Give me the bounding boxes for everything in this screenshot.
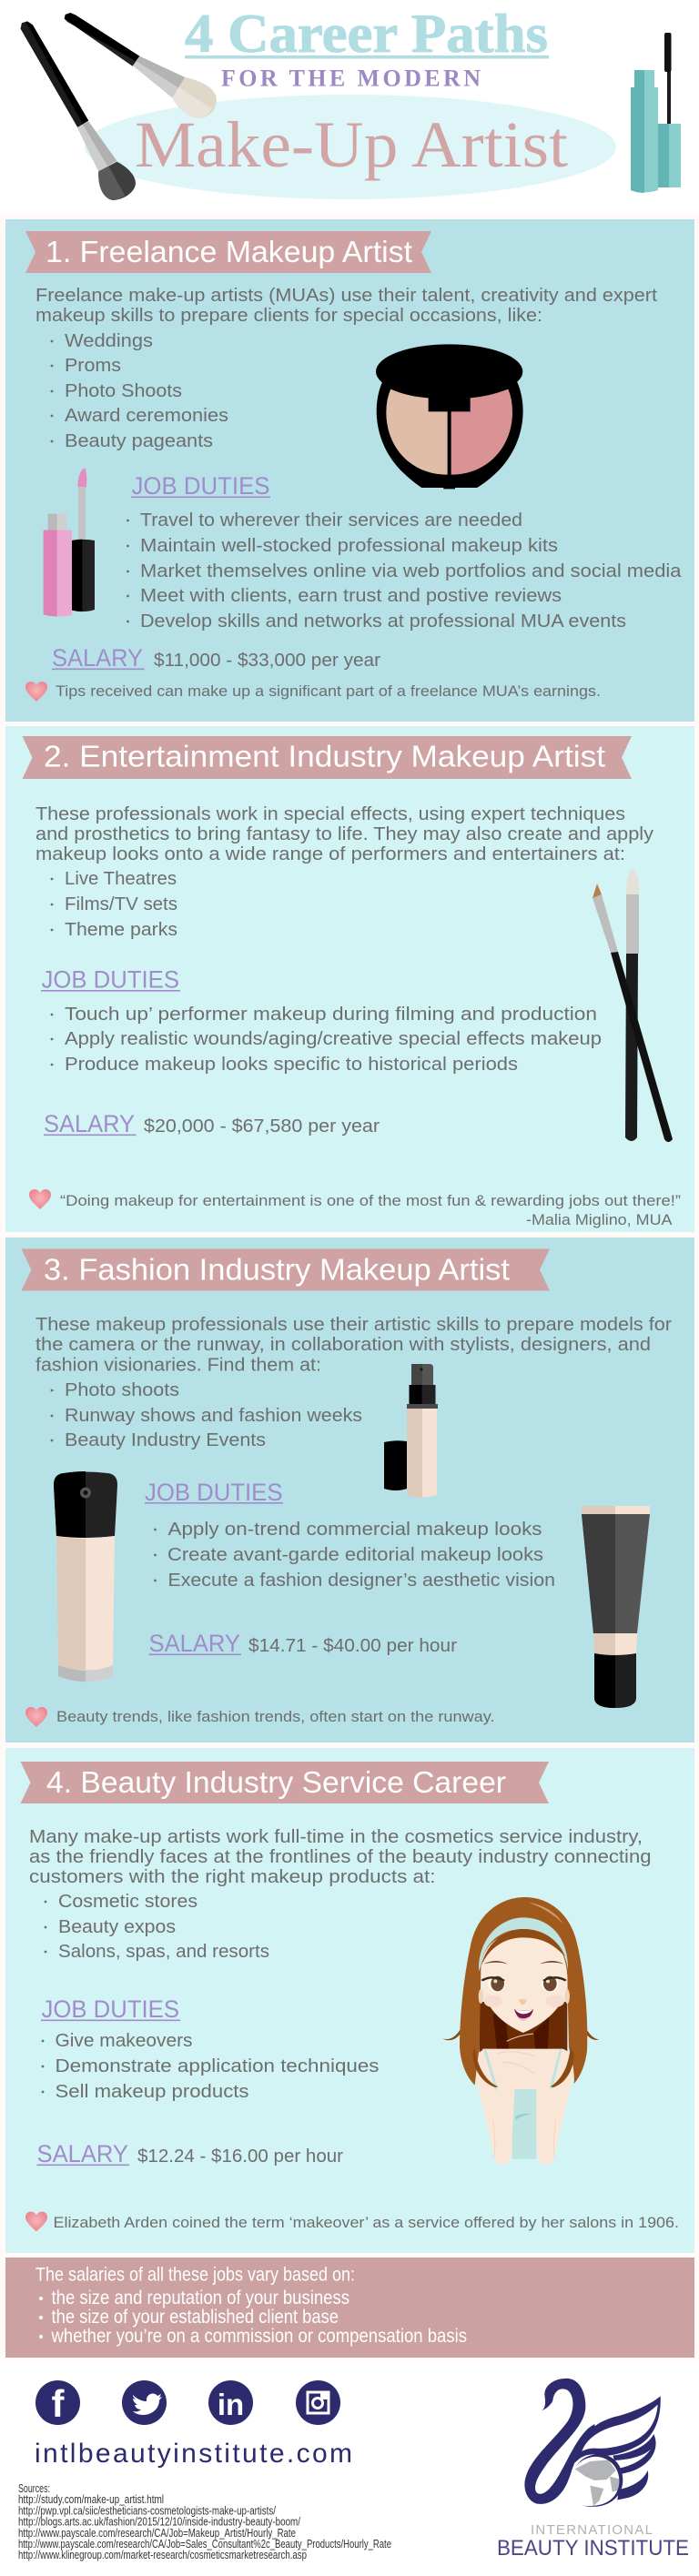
salary: SALARY bbox=[149, 1630, 240, 1657]
job duties list: Sell makeup products bbox=[55, 2082, 249, 2102]
icon: large foundation bottle bbox=[54, 1471, 117, 1682]
ribbon heading 3: 3. Fashion Industry Makeup Artist bbox=[44, 1252, 510, 1287]
intro text bbox=[35, 286, 657, 326]
salary: $20,000 - $67,580 per year bbox=[144, 1116, 380, 1136]
salary factors list: the size and reputation of your business bbox=[51, 2288, 350, 2308]
job duties list: Execute a fashion designer’s aesthetic vision bbox=[167, 1571, 555, 1591]
panel: freelance makeup artist bbox=[5, 219, 694, 722]
footer bbox=[0, 2362, 699, 2571]
intro text bbox=[35, 804, 653, 864]
quote bbox=[29, 1189, 681, 1228]
intro text: makeup skills to prepare clients for special occasions, like: bbox=[35, 306, 542, 326]
workplaces list: Cosmetic stores bbox=[58, 1892, 198, 1912]
intro text bbox=[29, 1827, 652, 1887]
icon: twitter bbox=[122, 2380, 167, 2425]
icon: compact palette bbox=[376, 344, 523, 489]
salary bbox=[44, 1110, 380, 1137]
venues list: Theme parks bbox=[65, 920, 177, 940]
icon: teal mascara bbox=[631, 33, 681, 193]
job duties list bbox=[42, 2031, 379, 2102]
icon: dark tube bbox=[582, 1506, 650, 1708]
occasions list: Weddings bbox=[65, 331, 153, 351]
ribbon heading 4 bbox=[20, 1762, 549, 1803]
intro text: customers with the right makeup products at: bbox=[29, 1867, 435, 1887]
panel: beauty industry service career bbox=[5, 1748, 694, 2253]
icon: small foundation pump bbox=[384, 1364, 438, 1498]
logo text bbox=[497, 2522, 689, 2561]
intro text: Many make-up artists work full-time in the cosmetics service industry, bbox=[29, 1827, 643, 1847]
intro text: These makeup professionals use their artistic skills to prepare models for bbox=[35, 1315, 672, 1335]
job duties list: Maintain well-stocked professional makeup kits bbox=[140, 536, 558, 556]
salary bbox=[36, 2140, 343, 2167]
intro text bbox=[35, 1315, 672, 1376]
sources: Sources: bbox=[18, 2482, 50, 2495]
title: 4 Career Paths: 4 Career Paths bbox=[185, 4, 548, 64]
panel: entertainment industry makeup artist bbox=[5, 726, 694, 1232]
sources: http://study.com/make-up_artist.html bbox=[18, 2493, 164, 2506]
job duties list: Develop skills and networks at professional MUA events bbox=[140, 611, 626, 631]
icon: cream blush brush bbox=[65, 13, 217, 118]
job duties list: Produce makeup looks specific to historical periods bbox=[65, 1055, 518, 1075]
ribbon heading 4: 4. Beauty Industry Service Career bbox=[46, 1765, 506, 1799]
venues list bbox=[51, 869, 177, 940]
ribbon heading 3 bbox=[22, 1248, 550, 1290]
intro text: as the friendly faces at the frontlines of the beauty industry connecting bbox=[29, 1847, 652, 1867]
salary: SALARY bbox=[44, 1110, 135, 1137]
icon: pink lip gloss bbox=[44, 468, 95, 617]
intro text: These professionals work in special effects, using expert techniques bbox=[35, 804, 625, 824]
intro text: makeup looks onto a wide range of performers and entertainers at: bbox=[35, 844, 625, 864]
salary: $12.24 - $16.00 per hour bbox=[137, 2147, 343, 2167]
salary: SALARY bbox=[36, 2140, 128, 2167]
events list: Photo shoots bbox=[65, 1380, 179, 1400]
sources bbox=[18, 2482, 391, 2561]
sources: http://pwp.vpl.ca/siic/estheticians-cosmetologists-make-up-artists/ bbox=[18, 2504, 276, 2517]
intro text: Freelance make-up artists (MUAs) use their talent, creativity and expert bbox=[35, 286, 657, 306]
salary factors list: whether you’re on a commission or compensation basis bbox=[51, 2326, 467, 2347]
ribbon heading 1: 1. Freelance Makeup Artist bbox=[46, 235, 412, 268]
job duties list bbox=[154, 1520, 555, 1591]
tip: Beauty trends, like fashion trends, often start on the runway. bbox=[56, 1708, 495, 1725]
ribbon heading 2: 2. Entertainment Industry Makeup Artist bbox=[44, 739, 605, 773]
job duties list: Demonstrate application techniques bbox=[55, 2056, 379, 2076]
quote: “Doing makeup for entertainment is one of the most fun & rewarding jobs out there!” bbox=[60, 1192, 681, 1209]
occasions list: Proms bbox=[65, 356, 121, 376]
intro text: the camera or the runway, in collaboration with stylists, designers, and bbox=[35, 1335, 651, 1355]
ribbon heading 2 bbox=[22, 736, 632, 779]
intro text: and prosthetics to bring fantasy to life. They may also create and apply bbox=[35, 824, 653, 844]
job duties list: Touch up’ performer makeup during filming and production bbox=[65, 1005, 597, 1025]
icon: instagram bbox=[296, 2380, 340, 2425]
title: Make-Up Artist: Make-Up Artist bbox=[135, 108, 568, 181]
icon: linkedin bbox=[208, 2380, 253, 2425]
job duties list bbox=[51, 1005, 602, 1075]
events list: Runway shows and fashion weeks bbox=[65, 1406, 362, 1426]
occasions list bbox=[51, 331, 228, 451]
icon: facebook bbox=[35, 2380, 80, 2425]
events list bbox=[51, 1380, 362, 1450]
job duties heading: JOB DUTIES bbox=[42, 966, 179, 994]
job duties list: Apply realistic wounds/aging/creative special effects makeup bbox=[65, 1029, 602, 1049]
job duties heading: JOB DUTIES bbox=[145, 1479, 282, 1506]
salary bbox=[52, 644, 380, 672]
job duties list: Market themselves online via web portfolios and social media bbox=[140, 561, 682, 581]
occasions list: Beauty pageants bbox=[65, 431, 213, 451]
tip: Elizabeth Arden coined the term ‘makeover’ as a service offered by her salons in 1906. bbox=[53, 2214, 679, 2231]
salary: $11,000 - $33,000 per year bbox=[154, 651, 380, 671]
venues list: Films/TV sets bbox=[65, 894, 177, 914]
website address: intlbeautyinstitute.com bbox=[35, 2439, 352, 2469]
salary factors heading: The salaries of all these jobs vary based on: bbox=[35, 2264, 355, 2286]
tip: Tips received can make up a significant part of a freelance MUA’s earnings. bbox=[56, 682, 601, 700]
sources: http://www.payscale.com/research/CA/Job=Sales_Consultant%2c_Beauty_Products/Hourly_Rate bbox=[18, 2538, 391, 2551]
workplaces list: Salons, spas, and resorts bbox=[58, 1942, 269, 1962]
icon: crossed makeup brushes bbox=[593, 870, 673, 1142]
job duties list: Create avant-garde editorial makeup looks bbox=[167, 1545, 543, 1565]
panel: fashion industry makeup artist bbox=[5, 1237, 694, 1743]
logo text: BEAUTY INSTITUTE bbox=[497, 2536, 689, 2561]
venues list: Live Theatres bbox=[65, 869, 177, 889]
panel: salary factors bbox=[5, 2258, 694, 2358]
workplaces list bbox=[45, 1892, 269, 1962]
job duties list bbox=[127, 510, 682, 631]
icon: facebook: f bbox=[51, 2382, 66, 2425]
sources: http://blogs.arts.ac.uk/fashion/2015/12/10/inside-industry-beauty-boom/ bbox=[18, 2515, 300, 2528]
salary: $14.71 - $40.00 per hour bbox=[248, 1636, 457, 1656]
job duties heading: JOB DUTIES bbox=[131, 472, 269, 500]
salary factors list bbox=[39, 2288, 467, 2347]
sources: http://www.klinegroup.com/market-research/cosmeticsmarketresearch.asp bbox=[18, 2549, 307, 2561]
job duties list: Apply on-trend commercial makeup looks bbox=[167, 1520, 542, 1540]
salary factors list: the size of your established client base bbox=[51, 2307, 339, 2328]
logo: swan and globe bbox=[497, 2379, 689, 2561]
title ellipse bbox=[85, 95, 616, 199]
intro text: fashion visionaries. Find them at: bbox=[35, 1356, 321, 1376]
salary bbox=[149, 1630, 457, 1657]
events list: Beauty Industry Events bbox=[65, 1430, 266, 1450]
header bbox=[21, 4, 681, 200]
logo text: INTERNATIONAL bbox=[531, 2522, 653, 2538]
job duties list: Meet with clients, earn trust and postive reviews bbox=[140, 586, 562, 606]
sources: http://www.payscale.com/research/CA/Job=Makeup_Artist/Hourly_Rate bbox=[18, 2527, 296, 2540]
icon: linkedin: in bbox=[218, 2388, 244, 2421]
occasions list: Award ceremonies bbox=[65, 406, 228, 426]
subtitle: FOR THE MODERN bbox=[221, 66, 481, 91]
quote: -Malia Miglino, MUA bbox=[526, 1211, 673, 1228]
job duties list: Give makeovers bbox=[55, 2031, 193, 2051]
workplaces list: Beauty expos bbox=[58, 1917, 176, 1937]
salary: SALARY bbox=[52, 644, 143, 672]
icon: black powder brush bbox=[21, 21, 136, 200]
job duties list: Travel to wherever their services are needed bbox=[140, 510, 522, 530]
occasions list: Photo Shoots bbox=[65, 381, 182, 401]
job duties heading: JOB DUTIES bbox=[42, 1995, 179, 2023]
illustration: smiling woman bbox=[442, 1897, 599, 2165]
